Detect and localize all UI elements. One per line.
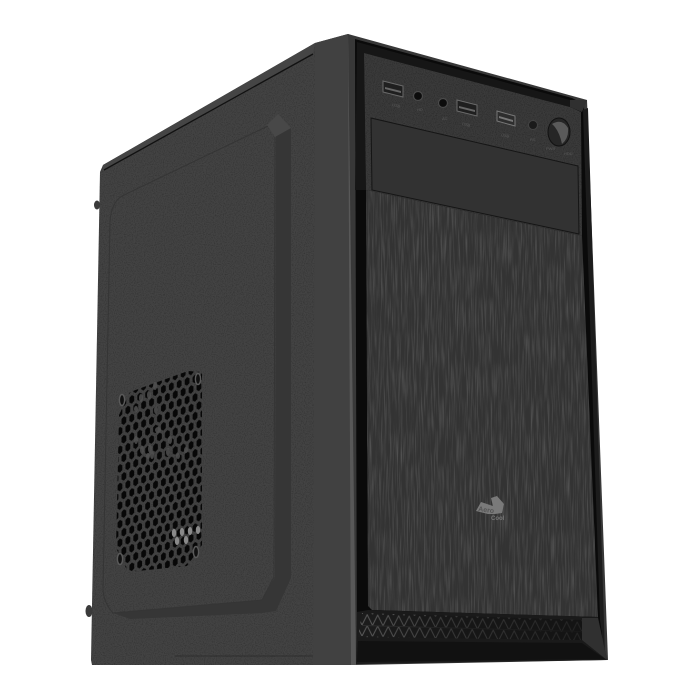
fan seen through grille [134, 382, 188, 459]
port labels [392, 102, 573, 156]
bottom seam [175, 655, 313, 657]
logo: Aerocool [476, 496, 505, 522]
logo: Aerocool: Aero [478, 506, 494, 515]
audio jack 2 [438, 98, 448, 108]
icon: panel thumb notch [267, 114, 291, 137]
panel: bottom vent [355, 610, 607, 664]
USB port 3 [497, 111, 515, 126]
embossed panel shadow [113, 128, 291, 619]
icon: upper thumb screw [94, 200, 100, 210]
logo: Aerocool: Cool [491, 516, 505, 522]
illustration: PC tower case [86, 34, 608, 665]
port labels: RS [530, 137, 536, 142]
grille mounting screws [117, 374, 201, 564]
panel: brushed front door [360, 186, 600, 620]
port labels: AC [442, 116, 448, 121]
port labels: USB [392, 102, 401, 109]
panel: side of case [90, 34, 356, 666]
port labels: PWR [546, 146, 555, 151]
audio jack 1 [414, 92, 422, 100]
panel: top I/O section [360, 50, 585, 240]
front-left corner strip [313, 34, 356, 665]
reset button [528, 120, 538, 130]
panel: front bezel [348, 34, 608, 665]
top groove [103, 43, 315, 170]
port labels: HD [417, 107, 423, 112]
port labels: USB [462, 121, 471, 128]
USB port 2 [457, 100, 477, 116]
light glints through grille [172, 526, 200, 545]
power button [548, 118, 570, 146]
embossed panel outline [103, 126, 275, 613]
USB port 1 [383, 81, 403, 97]
ventilation grille [116, 371, 202, 572]
port labels: HDD [564, 151, 573, 156]
drive bay cover [371, 118, 579, 234]
icon: lower thumb screw [86, 605, 92, 617]
port labels: USB [501, 132, 510, 139]
